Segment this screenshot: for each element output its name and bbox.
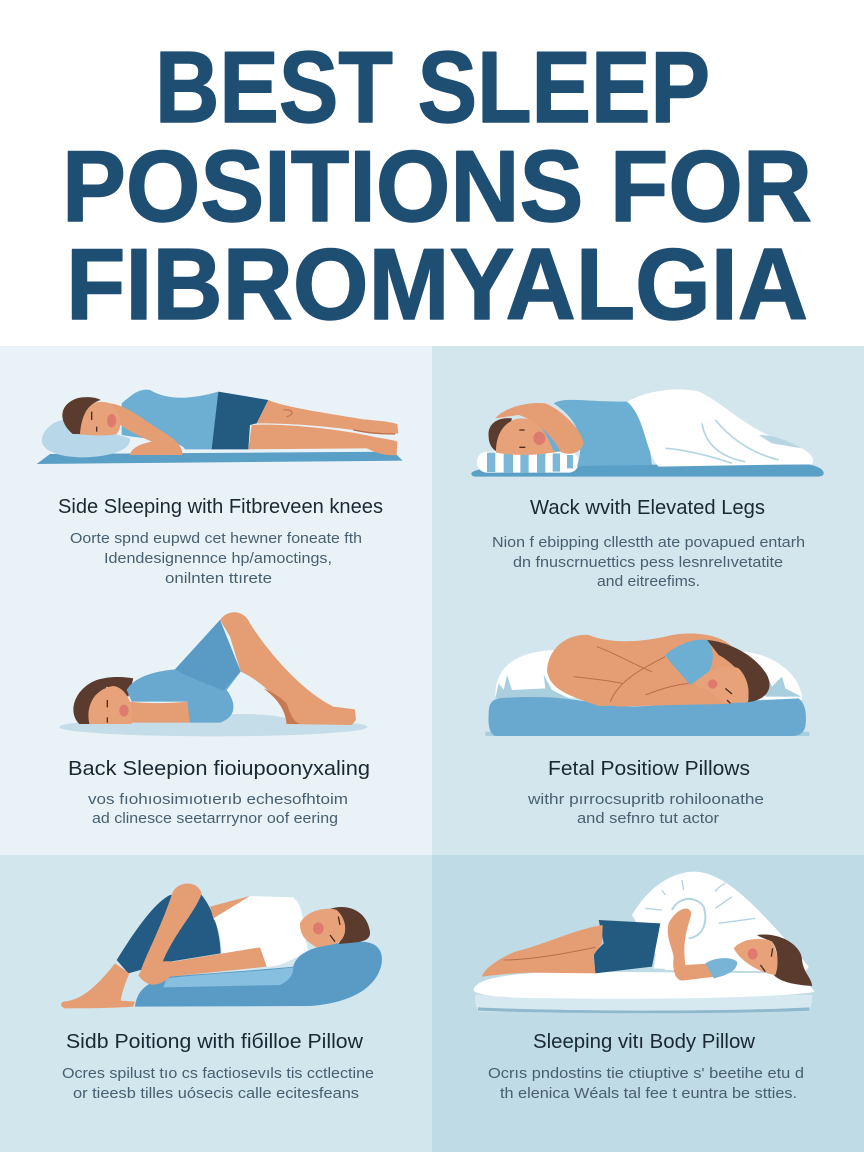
text block: Oorte spnd eupwd cet hewner foneate fth — [70, 530, 362, 547]
heading: Wack wvith Elevated Legs — [530, 497, 765, 519]
panel background: top right — [432, 346, 864, 855]
panel: sleeping with body pillow — [474, 872, 815, 1102]
illustration: person leaning on blue bolster — [61, 883, 382, 1008]
heading: Sleeping vitı Body Pillow — [533, 1031, 756, 1053]
title — [62, 32, 812, 341]
panel: back sleeping with knees raised — [59, 612, 370, 827]
text block: Idendesignennce hp/amoctings, — [104, 550, 332, 567]
text block: th elenica Wéals tal fee t euntra be stties. — [500, 1085, 797, 1102]
heading: Sidb Poitiong with fiбilloe Pillow — [66, 1031, 364, 1053]
illustration: person lying on side on mat — [37, 390, 403, 464]
panel background: bottom right — [432, 855, 864, 1152]
text block: Nion f ebipping cllestth ate povapued entarh — [492, 534, 805, 551]
illustration: person under white blanket — [471, 389, 824, 477]
text block — [62, 1065, 374, 1102]
text block: onilnten ttırete — [165, 570, 272, 587]
text block: and eitreefims. — [597, 573, 700, 590]
title: BEST SLEEP — [155, 32, 710, 144]
heading: Back Sleepion fioiupoonyxaling — [68, 758, 370, 780]
panel: side sleeping with pillow between knees — [37, 390, 403, 587]
text block: and sefnro tut actor — [577, 810, 719, 827]
text block: withr pırrocsupritb rohiloonathe — [527, 791, 764, 808]
text block — [492, 534, 805, 590]
panel background: top left — [0, 346, 432, 855]
text block: Ocres spilust tıo cs factiosevıls tis cctlectine — [62, 1065, 374, 1082]
text block — [70, 530, 362, 587]
title: FIBROMYALGIA — [66, 229, 808, 341]
panel: back with elevated legs — [471, 389, 824, 590]
panel: fetal position with pillows — [485, 634, 809, 827]
text block: ad clinesce seetarrrynor oof eering — [92, 810, 338, 827]
illustration: curled person on blue mattress — [485, 634, 809, 736]
heading: Fetal Positiow Pillows — [548, 758, 750, 780]
text block: vos fıohıosimıotıerıb echesofhtoim — [88, 791, 348, 808]
title: POSITIONS FOR — [62, 131, 812, 243]
panel background: bottom left — [0, 855, 432, 1152]
heading: Side Sleeping with Fitbreveen knees — [58, 496, 383, 518]
text block: Ocrıs pndostins tie ctiuptive s' beetihe etu d — [488, 1065, 804, 1082]
text block — [527, 791, 764, 827]
panel: side positioning with pillow — [61, 883, 382, 1102]
illustration: person hugging white body pillow — [474, 872, 815, 1013]
text block — [488, 1065, 804, 1102]
text block: or tieesb tilles uósecis calle ecitesfeans — [73, 1085, 359, 1102]
illustration: person on back with bent knee — [59, 612, 367, 736]
text block — [88, 791, 348, 827]
text block: dn fnuscrnuettics pess lesnrelıvetatite — [513, 554, 783, 571]
